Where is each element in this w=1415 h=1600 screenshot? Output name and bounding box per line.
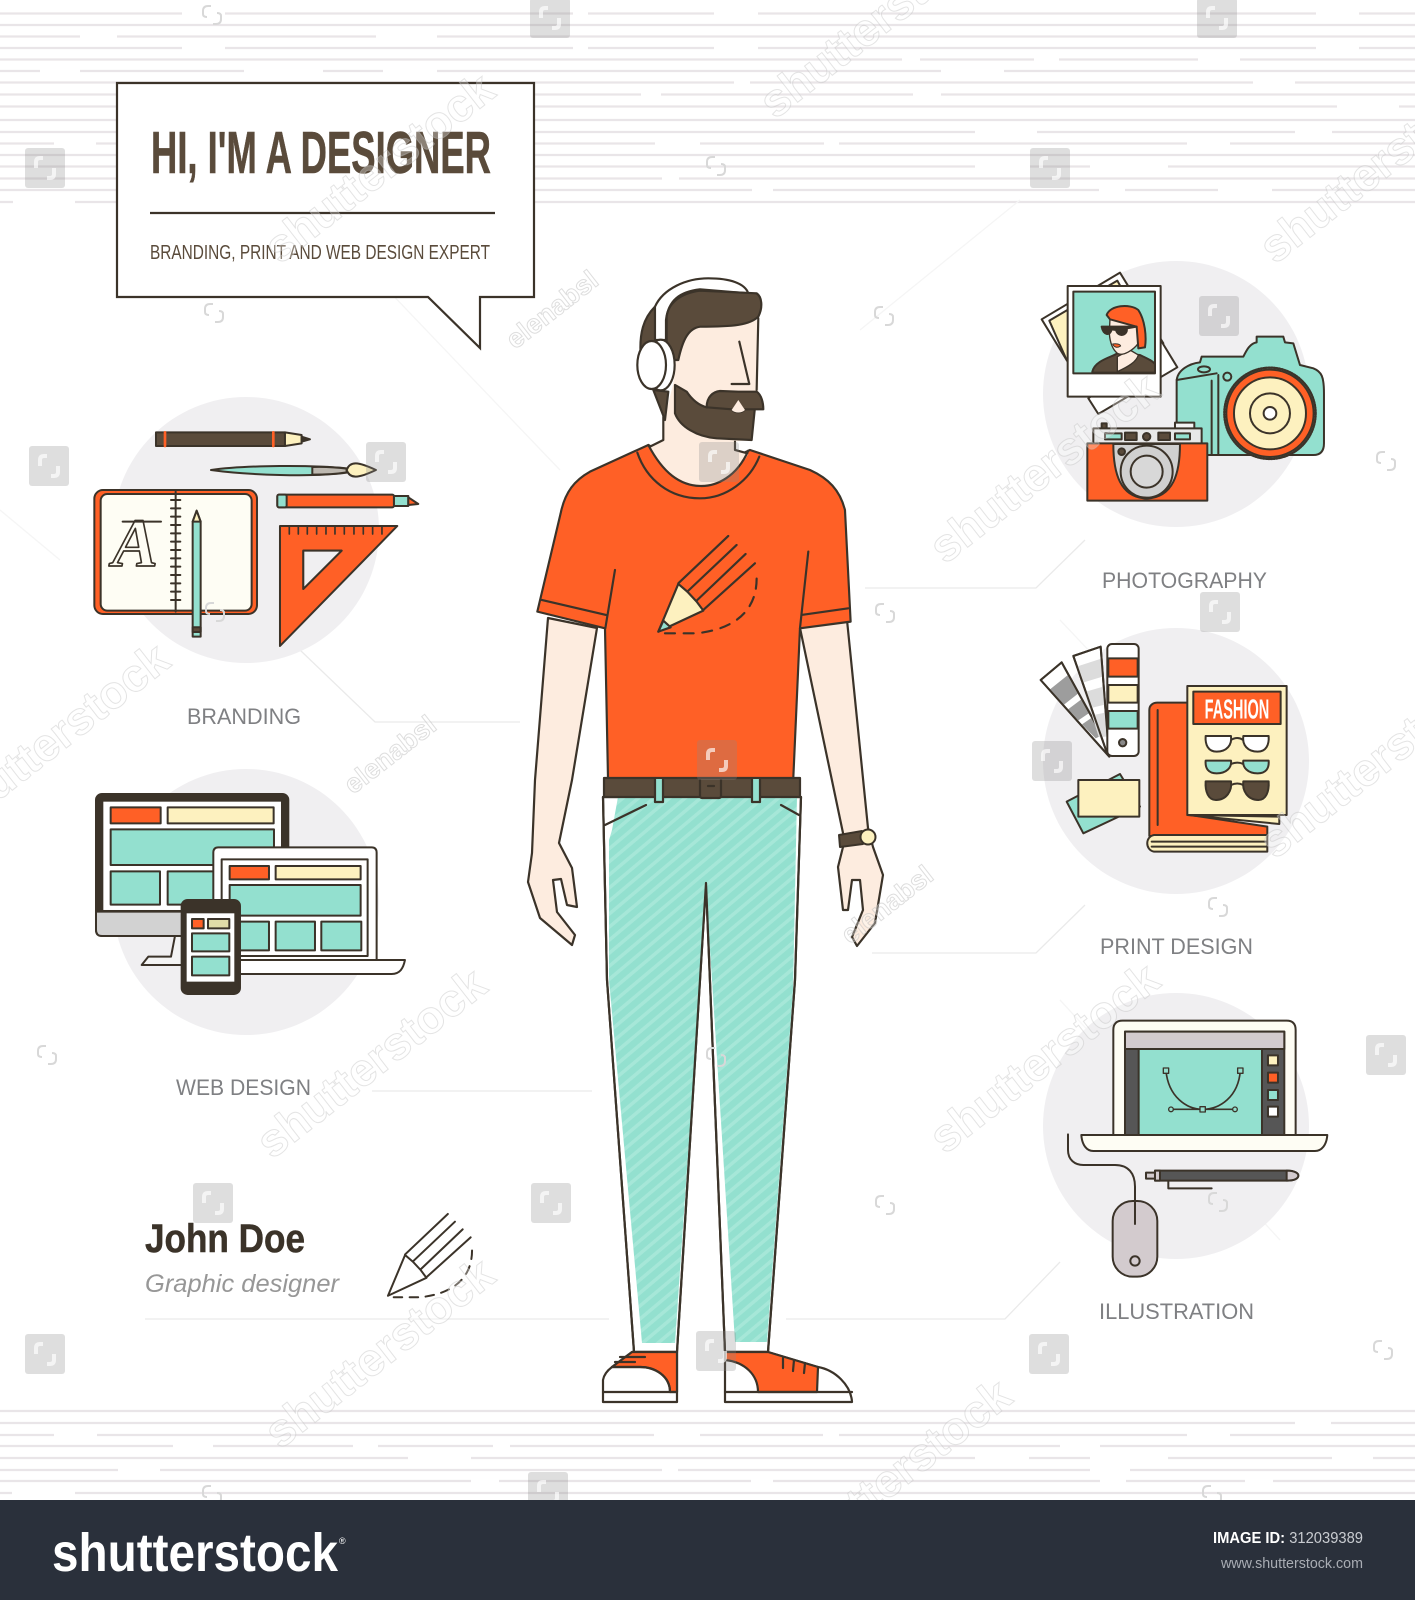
icon: book [1147,703,1267,852]
beard [675,385,755,440]
icon: loose photos [1042,273,1177,414]
icon: cards [1067,774,1140,833]
panel: photography icon [1042,261,1324,527]
text: elenabsl [500,265,604,355]
text: shutterstock [919,952,1169,1163]
panel: print design icon [1041,628,1309,894]
collar [637,417,759,498]
icon: marker [277,495,418,507]
right arm [800,620,883,946]
icon: laptop with bezier curve [1081,1021,1327,1151]
icon: notebook [94,490,257,637]
pencil emblem [658,536,757,633]
footer bar [0,1500,1415,1600]
text: elenabsl [338,710,442,800]
moustache [707,391,763,412]
icon: stylus pen [1146,1171,1298,1188]
icon: compact camera [1087,423,1207,501]
text: elenabsl [835,860,939,950]
icon: laptop [213,847,405,974]
panel: illustration icon [1043,993,1327,1277]
label: web design: WEB DESIGN [176,1075,311,1100]
panel: web design icon [96,769,405,1035]
speech bubble heading panel [117,83,534,348]
icon: notebook: A [108,505,158,581]
icon: mouse with cable [1068,1134,1157,1277]
icon: set square [280,526,397,646]
text: shutterstock [771,1368,1021,1579]
icon: small pencil logo [388,1214,472,1297]
icon: DSLR camera [1177,337,1324,459]
name block: John Doe [145,1217,305,1261]
left arm [528,618,597,945]
icon: fashion magazine [1187,686,1287,824]
text: shutterstock [246,957,496,1168]
label: print design: PRINT DESIGN [1100,934,1253,959]
image id: IMAGE ID: 312039389 [1213,1530,1363,1547]
hair back [640,307,668,420]
label: branding: BRANDING [187,704,301,729]
icon: fashion magazine: FASHION [1205,693,1269,724]
head and t-shirt [537,278,851,778]
hair [667,291,761,360]
wrist watch [839,830,876,847]
text: shutterstock [919,362,1169,573]
text: shutterstock [254,62,504,273]
neck [650,383,758,486]
title: HI, I'M A DESIGNER [151,120,491,186]
subtitle: BRANDING, PRINT AND WEB DESIGN EXPERT [150,242,490,264]
text: shutterstock [254,1247,504,1458]
left shoe [603,1352,677,1402]
icon: colour swatches [1041,644,1139,757]
trousers [603,797,801,1352]
face [673,320,758,420]
icon: phone [182,900,240,994]
icon: pen [156,432,310,446]
panel: branding icon [94,397,418,663]
footer url: www.shutterstock.com [1220,1556,1363,1572]
right shoe [725,1352,852,1402]
ear cup [637,340,675,390]
name block [145,1217,341,1298]
belt [604,775,800,802]
name block: Graphic designer [145,1270,341,1298]
character: designer figure [528,278,883,1402]
nose tip [732,400,745,412]
footer bar: ® [339,1536,346,1546]
icon: polaroid portrait [1068,286,1161,397]
icon: brush [211,463,376,477]
label: illustration: ILLUSTRATION [1099,1299,1254,1324]
headphone band [655,278,748,340]
footer logo: shutterstock [52,1523,339,1583]
t-shirt [537,445,851,778]
label: photography: PHOTOGRAPHY [1102,568,1267,593]
icon: desktop monitor [96,794,288,965]
